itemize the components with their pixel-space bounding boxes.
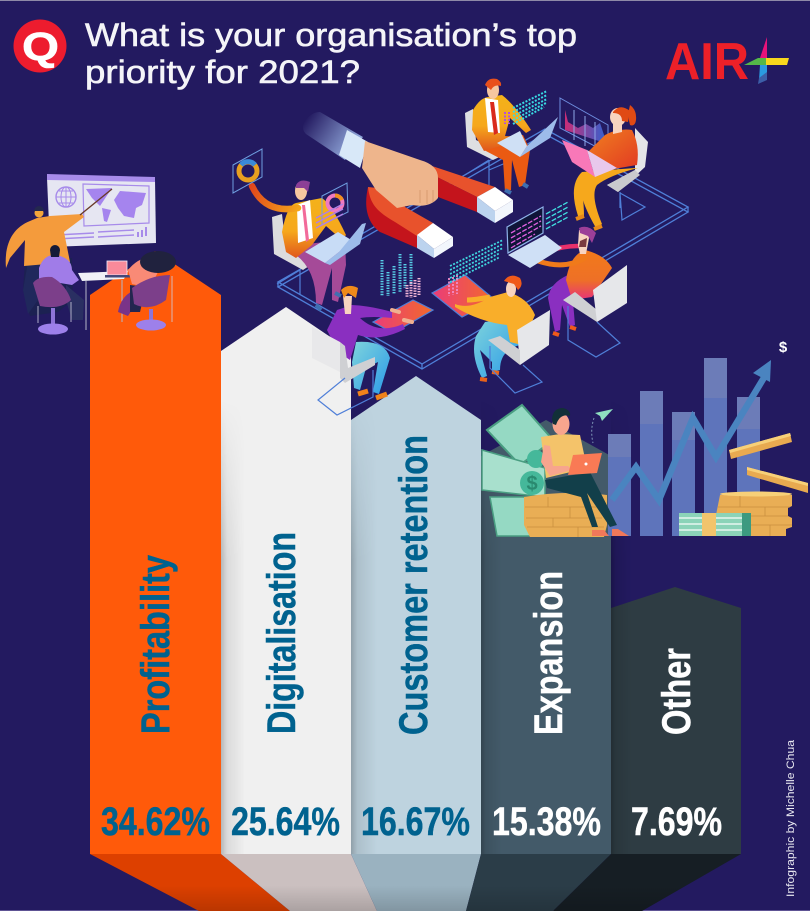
paper plane bbox=[592, 409, 613, 443]
tablet bbox=[373, 300, 433, 333]
worker: bottom centre, yellow shirt bbox=[432, 240, 550, 393]
bar chart: priorities bbox=[90, 251, 741, 911]
worker: right, bearded at laptop bbox=[507, 202, 627, 357]
label: Digitalisation: Digitalisation bbox=[260, 532, 304, 734]
worker: bottom left, purple shirt bbox=[312, 254, 433, 415]
illustration: expansion, growth and money bbox=[482, 339, 808, 537]
ring hologram 1 bbox=[233, 149, 262, 193]
laptop bbox=[497, 131, 527, 157]
presenter bbox=[6, 189, 112, 316]
coin stack under person bbox=[524, 493, 607, 537]
banknotes behind person: $ bbox=[526, 473, 538, 495]
title: What is your organisation’s top bbox=[85, 17, 577, 53]
bar: Customer retention bbox=[351, 376, 481, 854]
coin stack right bbox=[716, 492, 792, 536]
desk outline bbox=[278, 129, 688, 369]
banknotes behind person bbox=[482, 405, 553, 536]
icon: Q logo: Q bbox=[22, 25, 59, 69]
dollar sign: $ bbox=[779, 339, 788, 356]
laptop bbox=[305, 232, 353, 263]
label: Other: Other bbox=[655, 648, 699, 735]
code hologram bbox=[505, 91, 547, 124]
sleeve bbox=[303, 112, 363, 160]
worker: top right, ponytail bbox=[560, 98, 648, 229]
icon: AIR+ logo: AIR bbox=[665, 33, 749, 91]
bar: Expansion bbox=[481, 420, 611, 854]
value: 34.62%: 34.62% bbox=[101, 800, 210, 844]
growth arrow bbox=[612, 360, 771, 500]
fist bbox=[362, 141, 438, 208]
presentation board bbox=[47, 174, 156, 247]
illustration: isometric digital workspace bbox=[233, 79, 688, 415]
meeting table and laptop bbox=[78, 261, 131, 330]
ring hologram 2 bbox=[316, 183, 348, 228]
seated colleague right bbox=[118, 251, 176, 330]
value: 15.38%: 15.38% bbox=[492, 800, 601, 844]
bar: Digitalisation bbox=[221, 307, 351, 854]
title bbox=[85, 17, 577, 90]
growth chart bars bbox=[608, 358, 760, 536]
hologram chart bbox=[560, 98, 608, 153]
laptop bbox=[562, 140, 595, 177]
person on coins with laptop bbox=[541, 408, 629, 536]
label: Customer retention: Customer retention bbox=[392, 435, 436, 735]
banknote stack bbox=[679, 513, 751, 536]
inner edge shading bbox=[221, 400, 631, 854]
icon: Q logo bbox=[14, 20, 66, 72]
hand holding magnet bbox=[303, 112, 513, 258]
cuff bbox=[339, 130, 368, 168]
illustration: team presenting at a world map bbox=[6, 174, 176, 334]
label: Expansion: Expansion bbox=[527, 571, 571, 735]
falling coins bbox=[729, 433, 808, 493]
title: priority for 2021? bbox=[85, 54, 360, 90]
legs bbox=[352, 342, 390, 394]
value: 7.69%: 7.69% bbox=[631, 800, 722, 844]
chair bbox=[312, 327, 340, 372]
laptop with code bbox=[507, 207, 543, 253]
credit: Infographic by Michelle Chua bbox=[785, 739, 797, 897]
label: Profitability: Profitability bbox=[134, 554, 178, 734]
seated colleague left bbox=[33, 245, 84, 334]
hologram data columns bbox=[382, 254, 419, 298]
value: 16.67%: 16.67% bbox=[361, 800, 470, 844]
worker: top, yellow jacket bbox=[465, 79, 558, 193]
bar: Profitability bbox=[90, 251, 221, 854]
shirt bbox=[327, 305, 405, 360]
bar: Other bbox=[611, 587, 741, 854]
worker: left, touching hologram bbox=[233, 149, 366, 310]
raised arm bbox=[252, 186, 298, 209]
value: 25.64%: 25.64% bbox=[231, 800, 340, 844]
floor shadows under the bars bbox=[90, 854, 741, 911]
